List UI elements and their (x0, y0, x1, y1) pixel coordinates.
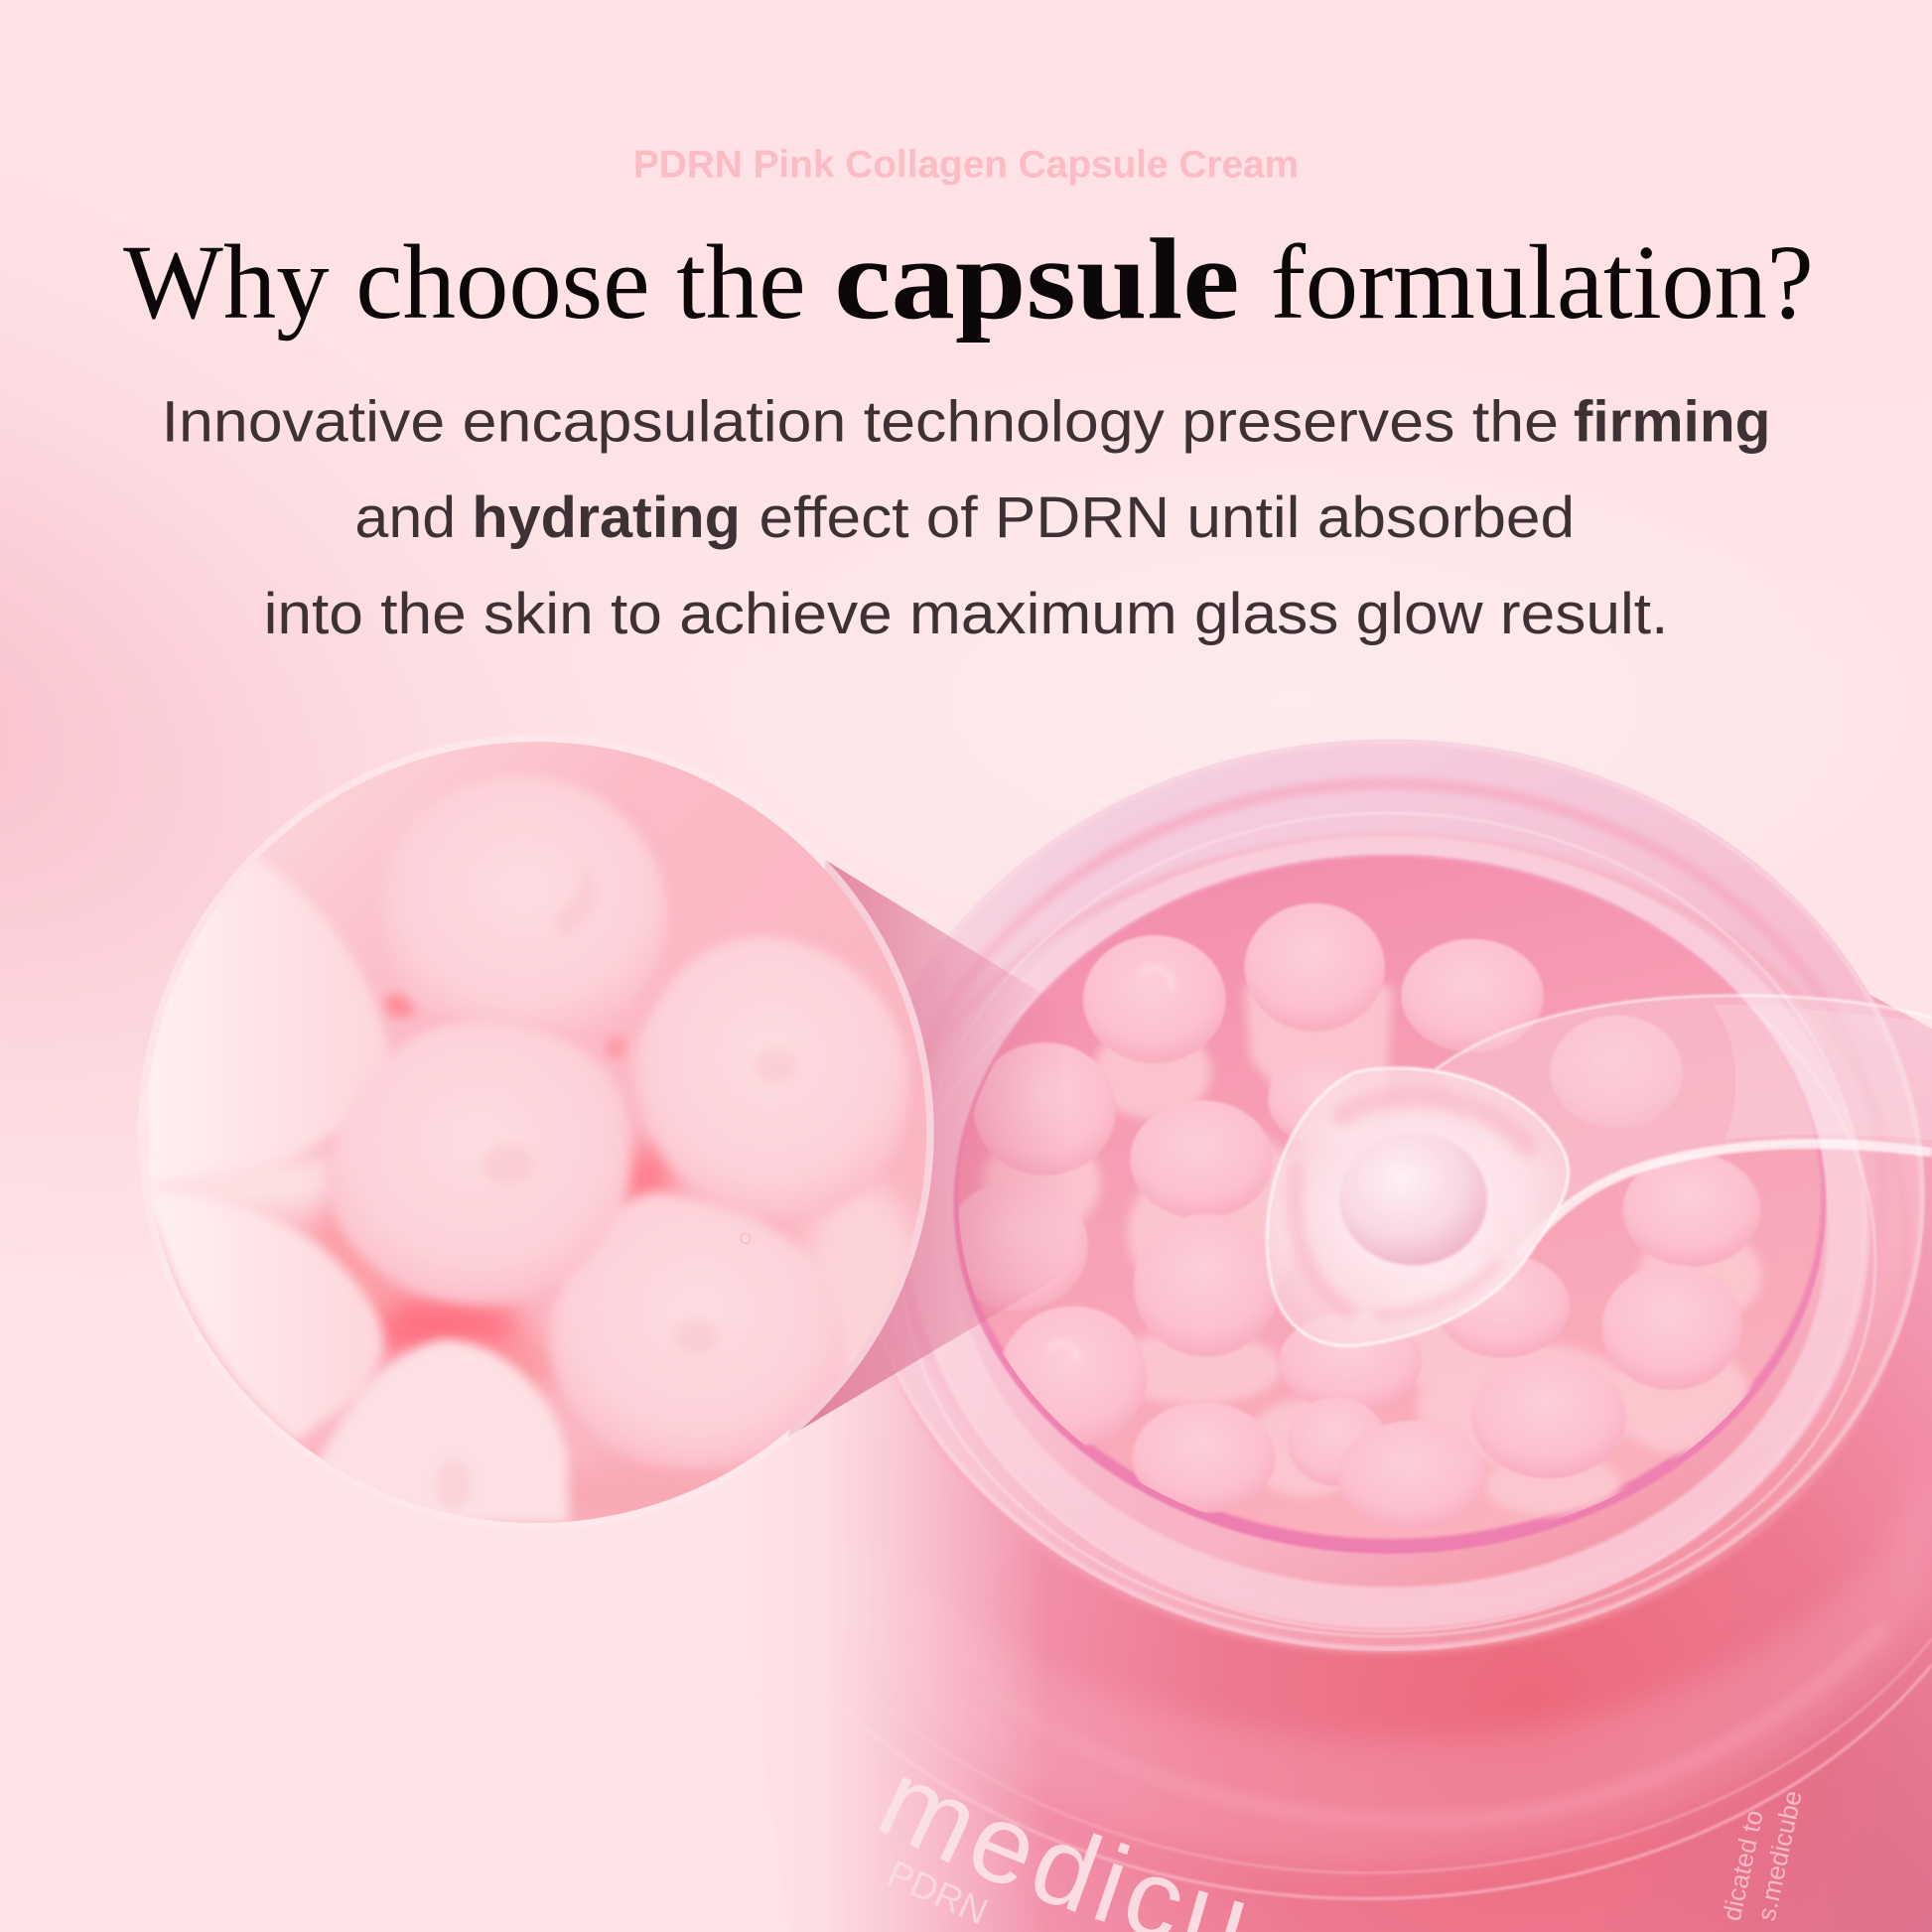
capsule pool (945, 854, 1826, 1554)
description text: Innovative encapsulation technology preserves the (162, 389, 1559, 454)
jar body (827, 995, 1932, 1932)
description text: and (354, 485, 456, 550)
spoon bowl with gel (1267, 1068, 1569, 1346)
capsules (945, 903, 1760, 1529)
spoon (1267, 996, 1932, 1346)
jar rim (853, 740, 1925, 1651)
spoon handle (1436, 995, 1932, 1205)
eyebrow label: PDRN Pink Collagen Capsule Cream (633, 144, 1299, 187)
brand text on jar: PDRN (882, 1852, 994, 1932)
description text: effect of PDRN until absorbed (759, 485, 1575, 550)
cream jar photo (827, 739, 1932, 1932)
title: formulation? (1271, 224, 1814, 342)
description text: firming (1574, 389, 1770, 454)
capsule on spoon (1339, 1133, 1487, 1266)
description text: into the skin to achieve maximum glass glow result. (264, 582, 1668, 646)
description text: hydrating (472, 485, 741, 550)
brand text on jar: s.medicube (1751, 1788, 1808, 1923)
magnifier cone (788, 860, 1072, 1437)
title: Why choose the (123, 224, 806, 342)
description text (162, 389, 1770, 646)
brand text on jar (879, 1777, 1801, 1932)
title: capsule (834, 215, 1240, 344)
title (123, 215, 1814, 344)
magnified capsules circle (86, 735, 934, 1534)
brand text on jar: dicated to (1717, 1808, 1769, 1923)
